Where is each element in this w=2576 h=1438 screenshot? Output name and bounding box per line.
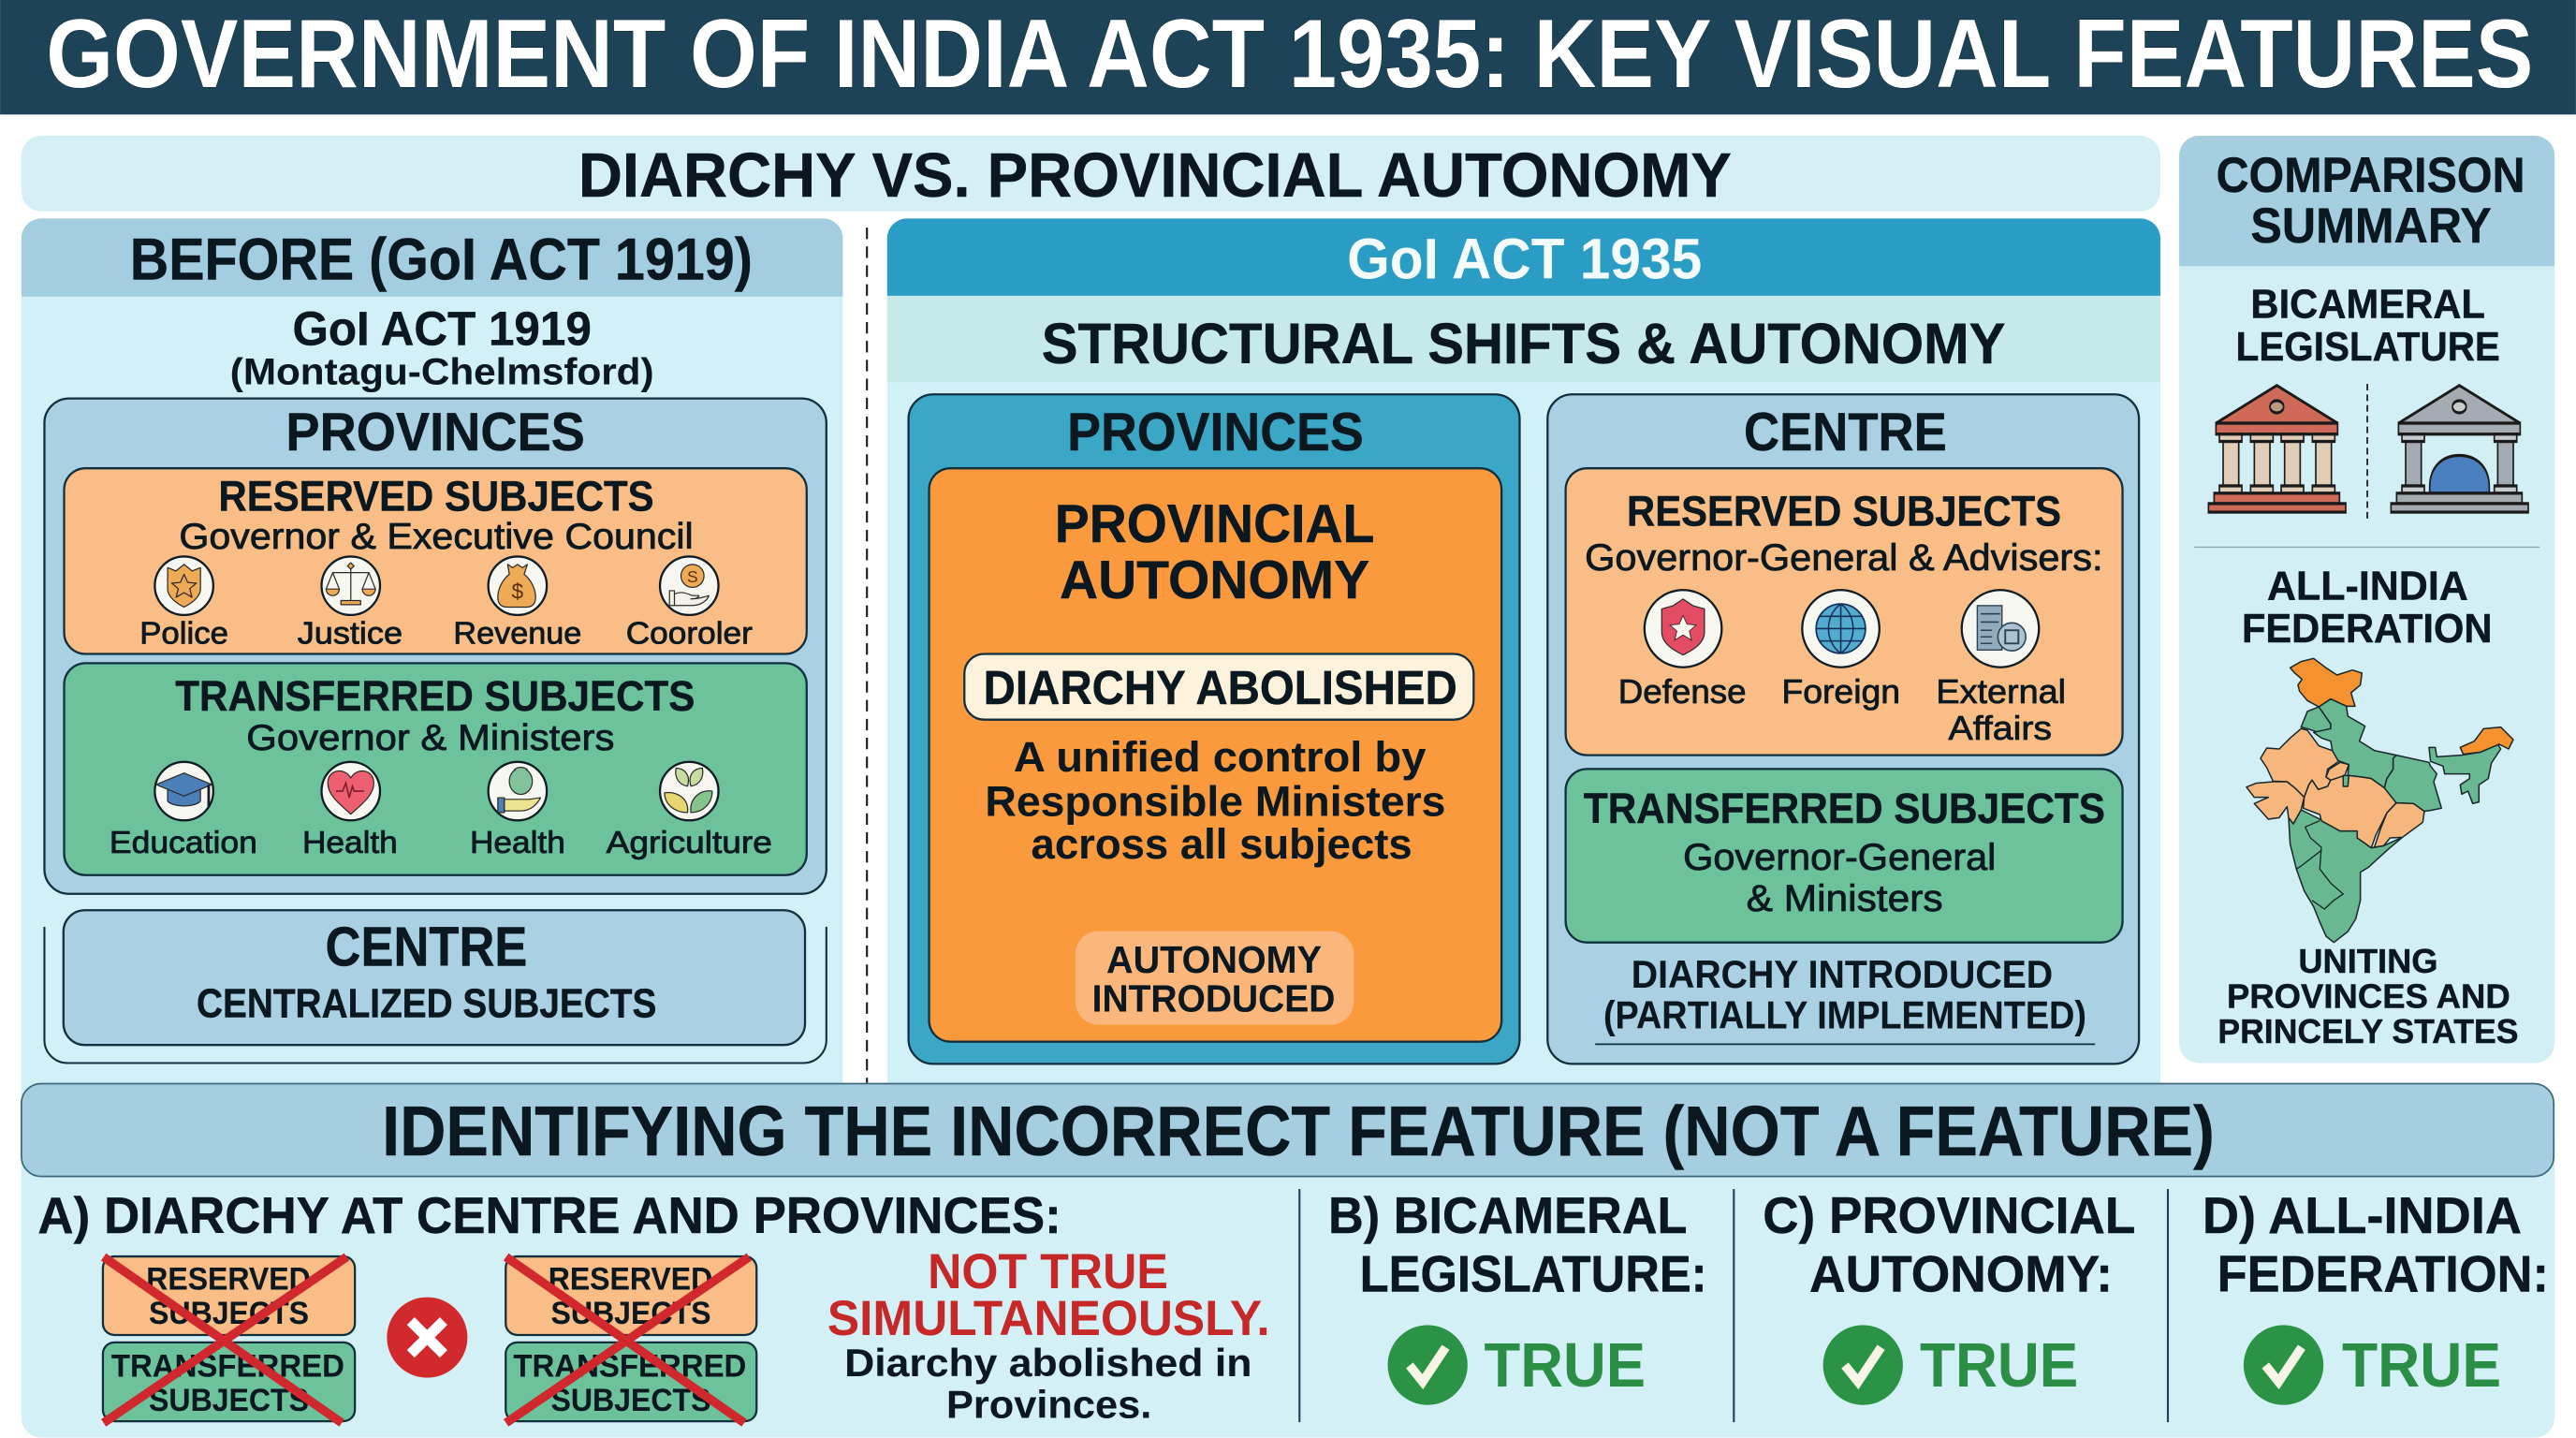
option C: AUTONOMY: (1809, 1245, 2113, 1302)
badge: diarchy abolished: DIARCHY ABOLISHED (984, 661, 1457, 714)
heading: comparison summary (2217, 148, 2525, 254)
option A (37, 1187, 1270, 1427)
icon: money bag: $ (512, 580, 524, 604)
box: provinces 1935 (909, 394, 1519, 1064)
box: transferred subjects 1935: TRANSFERRED SUBJECTS (1584, 785, 2105, 832)
heading: comparison summary: SUMMARY (2250, 198, 2492, 254)
labels: centre reserved subjects: Foreign (1781, 672, 1900, 711)
box: centre 1919: CENTRALIZED SUBJECTS (197, 980, 656, 1026)
labels: reserved subjects (139, 616, 753, 651)
icon: heart with pulse (322, 762, 380, 820)
panel: identifying the incorrect feature (22, 1083, 2554, 1438)
labels: reserved subjects: Justice (298, 616, 402, 651)
option A: A) DIARCHY AT CENTRE AND PROVINCES: (37, 1187, 1061, 1244)
labels: reserved subjects: Revenue (453, 616, 581, 651)
caption: uniting provinces (2217, 942, 2519, 1050)
box: provinces 1935: PROVINCES (1067, 403, 1364, 462)
labels: transferred subjects: Education (110, 826, 257, 860)
option D: FEDERATION: (2217, 1245, 2549, 1302)
text: not true simultaneously: Diarchy abolished in (844, 1341, 1251, 1385)
box: transferred subjects 1935 (1566, 769, 2123, 943)
text: unified control: Responsible Ministers (985, 778, 1445, 826)
badge: autonomy introduced: INTRODUCED (1092, 977, 1335, 1020)
icon: coin over hand: S (687, 567, 698, 586)
text: diarchy introduced (1595, 952, 2095, 1044)
subheading: GoI Act 1919: GoI ACT 1919 (292, 302, 592, 356)
badge: true (1388, 1325, 1646, 1405)
icon: money bag (489, 556, 547, 615)
text: diarchy introduced: DIARCHY INTRODUCED (1632, 952, 2053, 996)
heading: structural shifts: STRUCTURAL SHIFTS & AUTONOMY (1042, 312, 2005, 376)
badge: true: TRUE (1485, 1331, 1646, 1401)
icon: coin over hand (660, 556, 719, 615)
badge: true (2244, 1325, 2501, 1405)
icon: red cross (387, 1298, 467, 1378)
text: unified control (985, 733, 1445, 868)
labels: centre reserved subjects: Affairs (1949, 709, 2052, 747)
text: unified control: across all subjects (1032, 820, 1412, 868)
badge: true: TRUE (2342, 1331, 2501, 1401)
box: reserved subjects 1935: RESERVED SUBJECTS (1627, 487, 2061, 535)
labels: reserved subjects: Cooroler (626, 616, 753, 651)
caption: uniting provinces: UNITING (2298, 942, 2438, 980)
section heading: diarchy vs provincial autonomy (22, 136, 2160, 212)
crossed boxes: first pair (103, 1256, 355, 1423)
icon: upper house building (2208, 386, 2346, 512)
badge: autonomy introduced: AUTONOMY (1106, 938, 1322, 981)
crossed boxes: first pair: TRANSFERRED (111, 1349, 344, 1385)
heading: all-india federation (2242, 564, 2492, 652)
heading: bicameral legislature (2236, 281, 2500, 370)
icon: foreign globe (1802, 590, 1880, 668)
box: reserved subjects 1919: RESERVED SUBJECTS (218, 472, 654, 520)
crossed boxes: first pair: SUBJECTS (149, 1383, 309, 1418)
crossed boxes: second pair: SUBJECTS (551, 1383, 710, 1418)
heading: all-india federation: ALL-INDIA (2267, 564, 2468, 609)
badge: true: TRUE (1920, 1331, 2078, 1401)
box: provincial autonomy (929, 468, 1501, 1042)
labels: centre reserved subjects (1618, 672, 2066, 747)
heading: bicameral legislature: BICAMERAL (2250, 281, 2485, 327)
badge: autonomy introduced (1076, 932, 1354, 1025)
heading: bicameral legislature: LEGISLATURE (2236, 324, 2500, 370)
icon: map of India (2247, 658, 2513, 943)
box: reserved subjects 1935: Governor-General & Advisers: (1585, 537, 2102, 579)
box: provincial autonomy: AUTONOMY (1060, 550, 1369, 610)
labels: transferred subjects: Health (470, 826, 565, 860)
text: not true simultaneously: SIMULTANEOUSLY. (827, 1291, 1270, 1346)
box: transferred subjects 1919 (65, 663, 807, 875)
option B: LEGISLATURE: (1360, 1245, 1707, 1302)
heading: GoI Act 1935: GoI ACT 1935 (1347, 227, 1702, 292)
heading band: incorrect feature (22, 1083, 2554, 1177)
divider: before and after (866, 227, 868, 1083)
box: reserved subjects 1935 (1566, 468, 2123, 756)
caption: uniting provinces: PRINCELY STATES (2217, 1012, 2519, 1050)
crossed boxes: first pair: SUBJECTS (149, 1296, 309, 1331)
crossed boxes: second pair: RESERVED (549, 1262, 712, 1298)
box: transferred subjects 1935: Governor-General (1683, 837, 1996, 878)
crossed boxes: second pair (505, 1256, 756, 1423)
option C: C) PROVINCIAL (1763, 1187, 2135, 1244)
box: transferred subjects 1919: Governor & Ministers (246, 718, 614, 758)
text: not true simultaneously: NOT TRUE (928, 1244, 1168, 1299)
option D: D) ALL-INDIA (2203, 1187, 2522, 1244)
option dividers (1299, 1189, 2168, 1422)
option C (1763, 1187, 2135, 1405)
labels: transferred subjects: Health (302, 826, 398, 860)
text: not true simultaneously: Provinces. (946, 1383, 1151, 1427)
box: transferred subjects 1935: & Ministers (1747, 878, 1943, 919)
box: provincial autonomy: PROVINCIAL (1055, 494, 1374, 554)
box: centre 1935 (1547, 394, 2139, 1064)
heading: before: BEFORE (GoI ACT 1919) (130, 227, 753, 292)
box: centre 1919 (44, 910, 827, 1064)
box: transferred subjects 1919: TRANSFERRED SUBJECTS (175, 672, 695, 720)
icon: external affairs documents (1962, 590, 2039, 668)
panel: comparison summary (2179, 136, 2554, 1064)
box: centre 1919: CENTRE (326, 915, 527, 977)
text: unified control: A unified control by (1014, 733, 1427, 781)
icon: graduation cap (154, 762, 213, 820)
subheading: GoI Act 1919: (Montagu-Chelmsford) (230, 352, 654, 393)
icon: scales of justice (322, 556, 380, 615)
panel: before GoI Act 1919 (22, 218, 842, 1117)
option B: B) BICAMERAL (1328, 1187, 1687, 1244)
divider: two houses (2366, 384, 2368, 521)
panel: GoI Act 1935 (887, 218, 2160, 1117)
heading: all-india federation: FEDERATION (2242, 606, 2492, 652)
labels: centre reserved subjects: Defense (1618, 672, 1747, 711)
box: reserved subjects 1919 (65, 468, 807, 654)
labels: reserved subjects: Police (139, 616, 228, 651)
subheading: GoI Act 1919 (230, 302, 654, 393)
heading band: incorrect feature: IDENTIFYING THE INCORRECT FEATURE (NOT A FEATURE) (382, 1092, 2215, 1170)
icon: lower house building (2391, 386, 2528, 512)
icon: hand holding health capsule (489, 762, 547, 820)
text: diarchy introduced: (PARTIALLY IMPLEMENTED) (1603, 993, 2086, 1037)
heading: comparison summary: COMPARISON (2217, 148, 2525, 203)
labels: centre reserved subjects: External (1936, 672, 2066, 711)
box: provinces 1919 (44, 399, 827, 894)
caption: uniting provinces: PROVINCES AND (2227, 977, 2510, 1016)
box: centre 1935: CENTRE (1744, 403, 1947, 462)
labels: transferred subjects: Agriculture (607, 826, 772, 860)
badge: true (1823, 1325, 2078, 1405)
section heading: diarchy vs provincial autonomy: DIARCHY VS. PROVINCIAL AUTONOMY (578, 141, 1732, 211)
option D (2203, 1187, 2549, 1405)
box: provinces 1919: PROVINCES (285, 403, 585, 462)
box: reserved subjects 1919: Governor & Executive Council (179, 517, 694, 557)
crossed boxes: first pair: RESERVED (146, 1262, 311, 1298)
labels: transferred subjects (110, 826, 772, 860)
crossed boxes: second pair: SUBJECTS (551, 1296, 710, 1331)
option B (1328, 1187, 1707, 1405)
icon: police badge (154, 556, 213, 615)
text: not true simultaneously (827, 1244, 1270, 1427)
crossed boxes: second pair: TRANSFERRED (513, 1349, 746, 1385)
icon: agriculture leaves (660, 762, 719, 820)
icon: defense shield (1645, 590, 1721, 668)
